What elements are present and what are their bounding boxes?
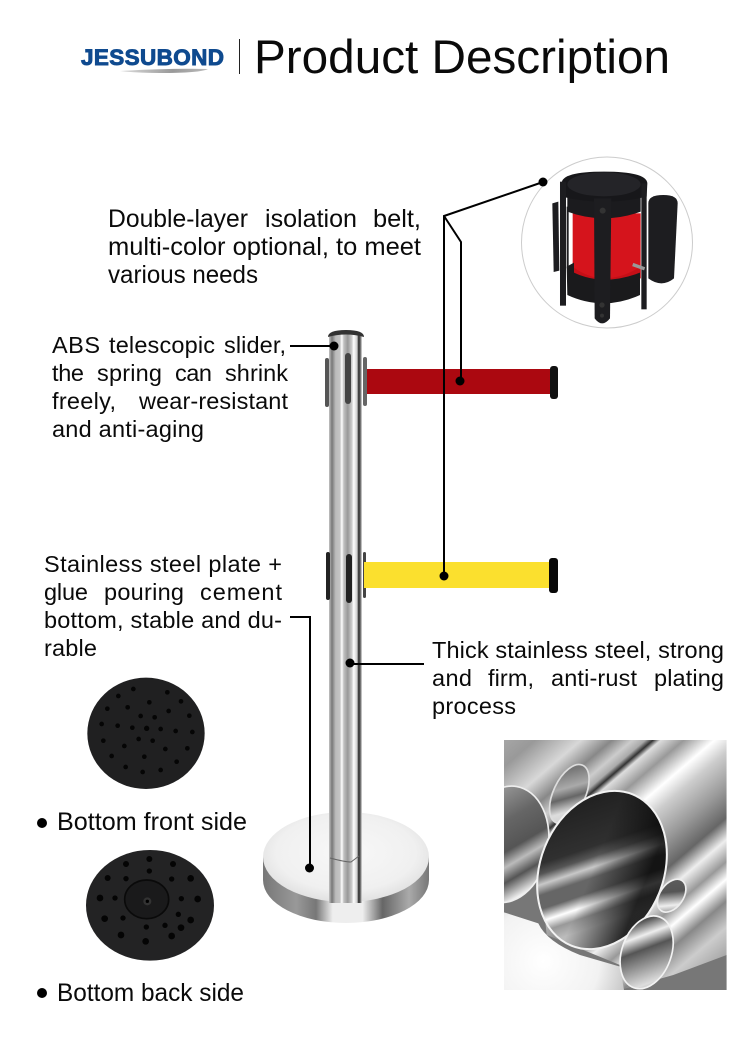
callout text: thick stainless steel: plating <box>654 665 724 691</box>
callout text: thick stainless steel: anti-rust <box>551 665 637 691</box>
callout text: thick stainless steel <box>432 637 724 719</box>
callout text: telescopic slider: slider, <box>224 332 286 358</box>
callout text: base plate: glue <box>44 579 88 605</box>
post tube <box>329 334 362 903</box>
callout text: base plate: Stainless steel plate + <box>44 551 282 577</box>
callout dots <box>440 178 548 580</box>
label: bottom back side: Bottom back side <box>57 979 244 1007</box>
title: Product Description <box>254 31 670 84</box>
callout text: base plate: rable <box>44 635 97 661</box>
callout text: double-layer belt: Double-layer <box>108 205 248 233</box>
label: bottom front side: Bottom front side <box>57 808 247 836</box>
callout text: telescopic slider: shrink <box>225 360 288 386</box>
callout text: double-layer belt: isolation <box>265 205 357 233</box>
callout text: base plate: cement <box>200 579 282 605</box>
photo: bottom back disc <box>86 850 214 961</box>
round base <box>263 812 429 923</box>
callout text: double-layer belt: belt, <box>373 205 421 233</box>
callout text: thick stainless steel: process <box>432 693 516 719</box>
photo: bottom front disc <box>87 678 205 789</box>
callout text: telescopic slider: the <box>52 360 84 386</box>
callout text: telescopic slider: wear-resistant <box>138 388 288 414</box>
callout text: base plate <box>44 551 282 661</box>
callout text: telescopic slider: spring <box>97 360 162 386</box>
callout text: telescopic slider: freely, <box>52 388 116 414</box>
callout text: base plate: bottom, stable and du- <box>44 607 282 633</box>
callout text: base plate: pouring <box>104 579 184 605</box>
post cap <box>328 330 364 337</box>
side cylinder <box>648 195 678 283</box>
callout text: double-layer belt <box>108 205 421 289</box>
callout text: double-layer belt: multi-color optional, to meet <box>108 233 421 261</box>
callout text: thick stainless steel: Thick stainless steel, strong <box>432 637 724 663</box>
leader: slider <box>290 342 338 350</box>
callout text: telescopic slider <box>52 332 288 442</box>
callout text: telescopic slider: telescopic <box>109 332 215 358</box>
leader lines for belt callout <box>444 182 543 576</box>
product: stanchion post with base <box>263 330 429 923</box>
callout text: telescopic slider: can <box>175 360 212 386</box>
yellow belt <box>364 558 558 593</box>
header logo: JESSUBOND: JESSUBOND <box>81 45 224 70</box>
callout text: double-layer belt: various needs <box>108 261 258 289</box>
inset: belt reel in circle <box>522 157 692 328</box>
leader: base plate <box>290 617 314 872</box>
callout text: thick stainless steel: and <box>432 665 472 691</box>
red belt <box>367 366 558 399</box>
callout text: thick stainless steel: firm, <box>488 665 534 691</box>
photo: stainless steel tubes <box>504 740 727 990</box>
leader: steel <box>346 658 424 668</box>
callout text: telescopic slider: and anti-aging <box>52 416 204 442</box>
callout text: telescopic slider: ABS <box>52 332 100 358</box>
